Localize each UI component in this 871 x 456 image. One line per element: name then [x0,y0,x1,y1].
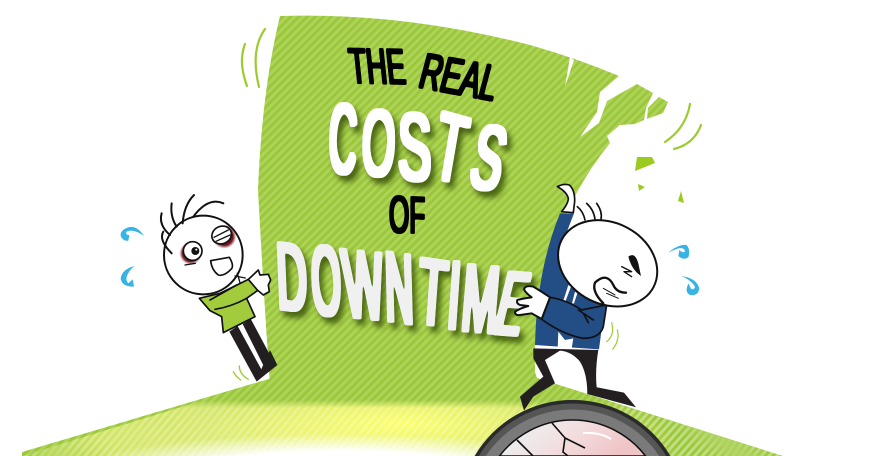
left man shirt [199,279,258,333]
panel: floor [22,378,783,456]
left man eyes [179,223,236,265]
left man hand [248,270,271,295]
right man raised hand [557,184,575,213]
title: THE REAL: REAL [414,42,505,111]
right man arm [542,297,607,338]
sweat drops [668,245,699,295]
title: DOWNTIME: D [274,221,309,333]
wall fragment [647,97,668,119]
left man head [164,216,243,294]
title: DOWNTIME: N [384,231,415,345]
right man shirt [558,285,577,348]
title: DOWNTIME: I [445,240,464,350]
right man arm fold [578,310,593,323]
title: COSTS: S [398,93,431,203]
title: DOWNTIME: O [309,225,343,337]
character: right man holding wall [515,184,699,411]
title: COSTS: O [360,92,397,197]
title: DOWNTIME: W [339,228,388,341]
right man jacket [535,213,605,349]
sweat drops [121,227,144,287]
left man shirt folds [210,285,247,309]
motion lines: wall [242,29,701,149]
character: left man pushing wall [121,195,277,382]
title: COSTS: C [327,82,359,196]
right man squinted eye [622,267,632,277]
falling wall debris [635,157,684,203]
right man hair lines [577,203,601,220]
title: DOWNTIME [274,221,537,354]
right man hand [515,286,550,319]
title: THE REAL: THE [346,38,408,95]
right man teeth [603,288,618,298]
title: OF: OF [389,185,425,245]
wheel: broken gauge [475,400,670,456]
left man mouth [211,257,232,275]
wall crack [565,57,574,87]
right man eye [628,255,641,276]
floor highlight [24,401,780,456]
title: DOWNTIME: T [415,238,451,346]
left man hair [161,195,223,253]
left man neck marks [235,273,245,283]
motion lines: body [607,323,618,349]
motion lines: feet [233,366,248,380]
left man legs [229,319,277,382]
title: COSTS: S [463,106,515,211]
title: DOWNTIME: M [458,244,503,354]
title: DOWNTIME: E [487,253,537,354]
title: COSTS [327,82,515,211]
right man legs [520,348,636,411]
title: THE REAL [346,38,505,111]
title: COSTS: T [428,92,474,204]
right man head [543,204,672,323]
panel: green cracked wall [258,16,653,390]
right man mouth [594,278,626,303]
